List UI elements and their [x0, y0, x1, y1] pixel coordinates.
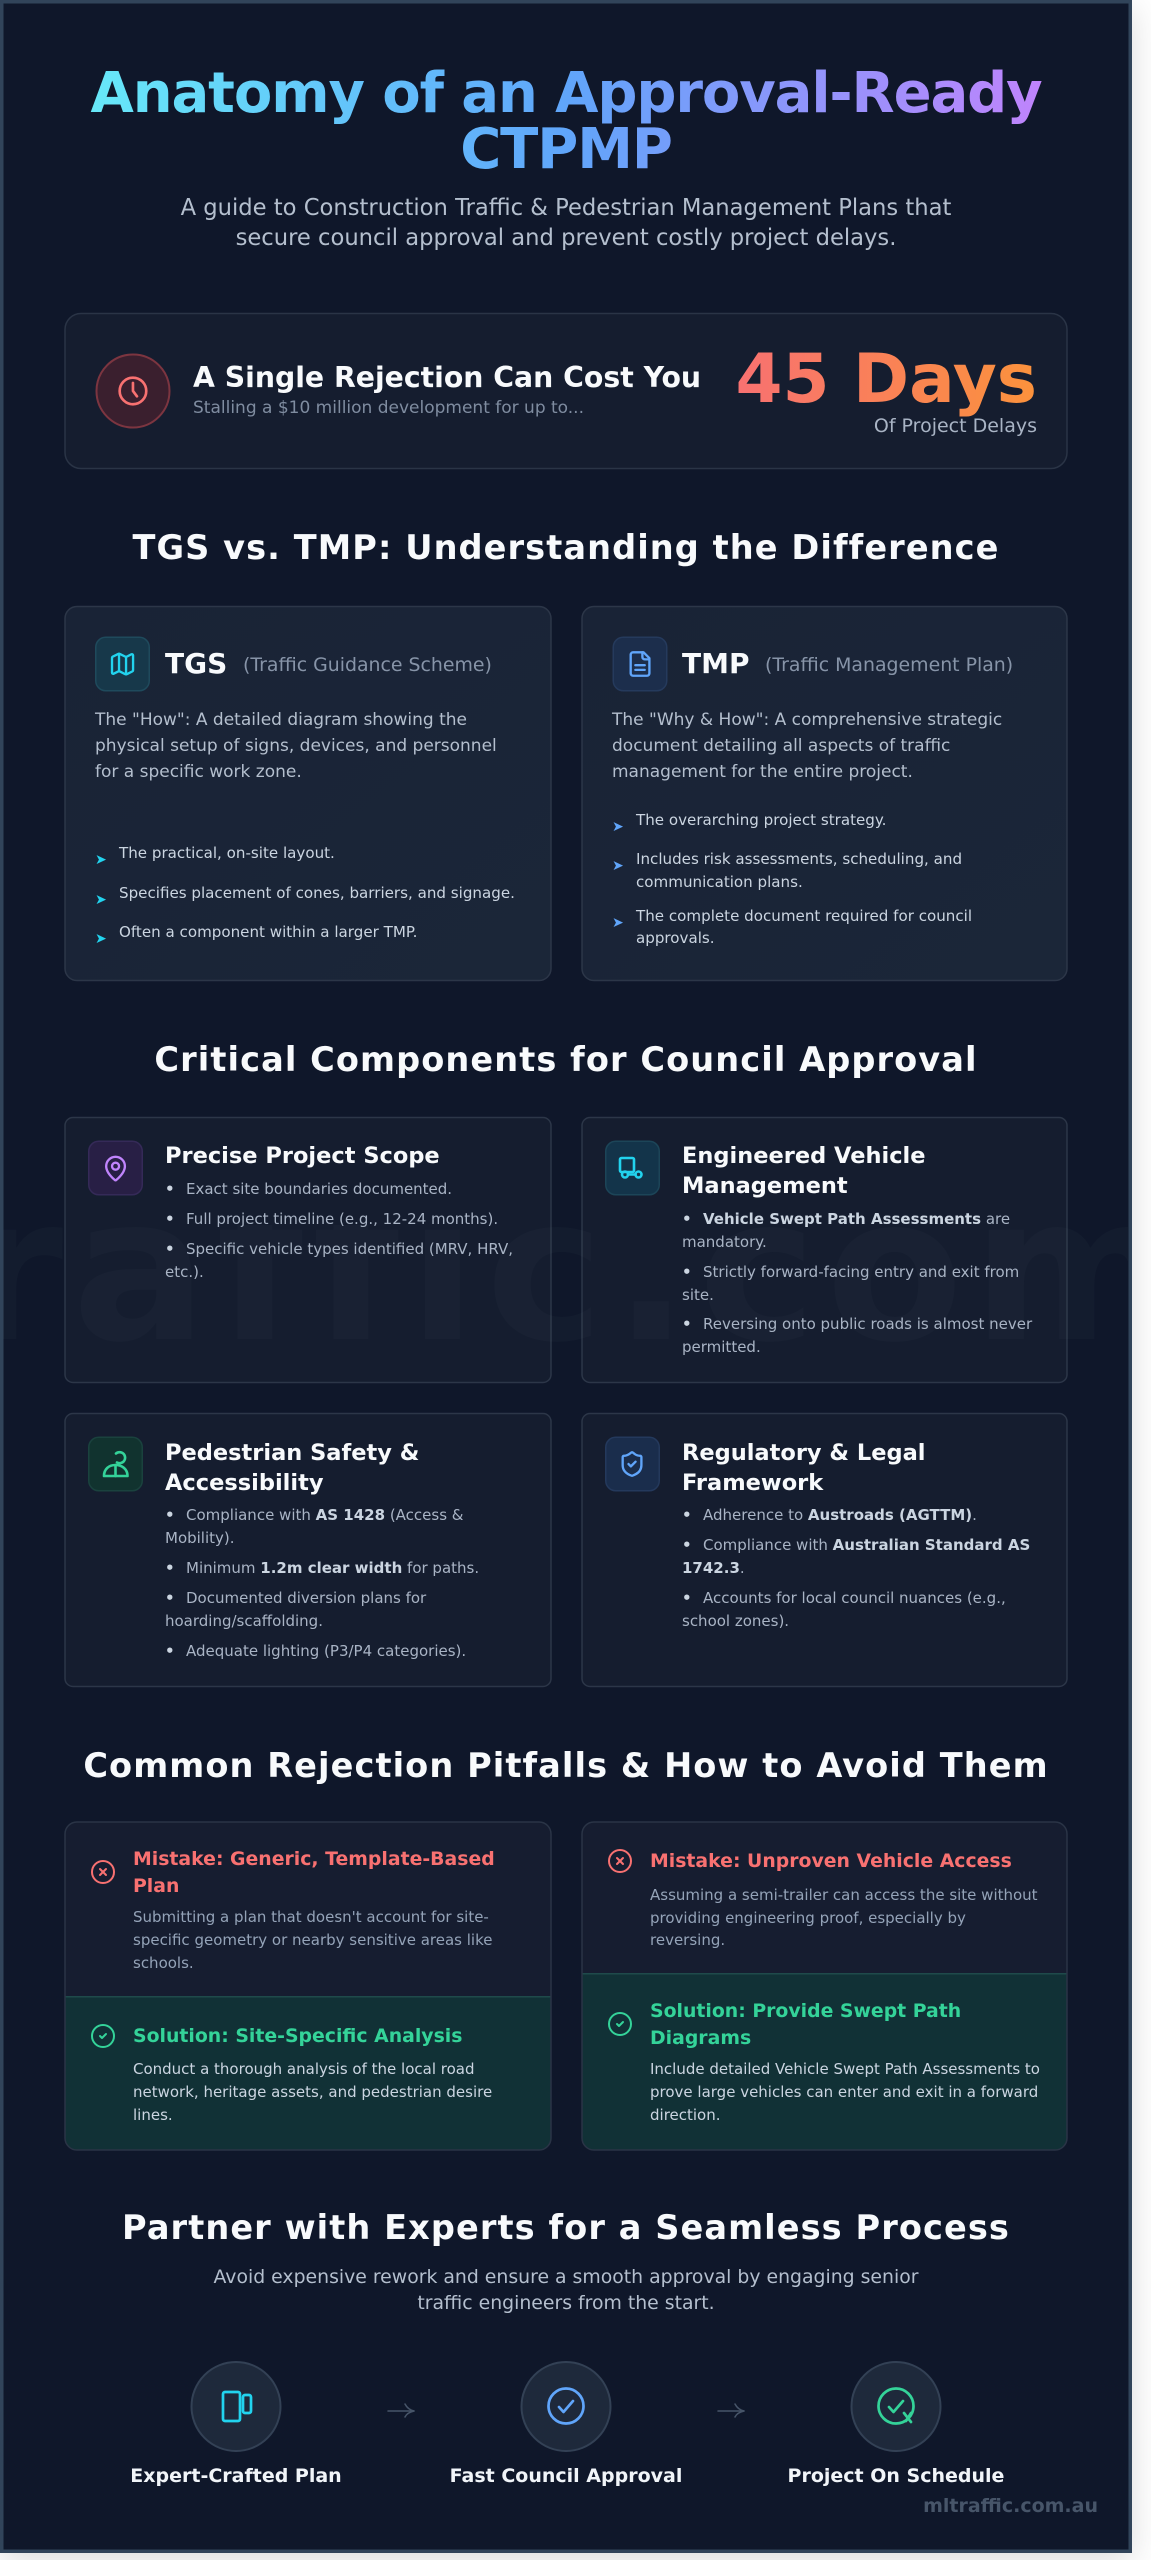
TGS description: The "How": A detailed diagram showing the: [94, 710, 467, 730]
subtitle: secure council approval and prevent costly project delays.: [236, 225, 896, 251]
icon: document: [613, 637, 667, 691]
icon: check circle: [548, 2388, 584, 2424]
TMP list: [612, 811, 972, 947]
callout heading: A Single Rejection Can Cost You: [193, 361, 701, 394]
mistake block: reversing.: [650, 1931, 725, 1949]
icon: map pin: [89, 1141, 142, 1195]
list: •: [682, 1589, 692, 1607]
panel: regulatory framework: [582, 1414, 1067, 1686]
icon: shield: [606, 1437, 659, 1491]
list: Adherence to Austroads (AGTTM).: [703, 1506, 977, 1524]
TMP description: document detailing all aspects of traffic: [612, 736, 950, 756]
TMP list: ➤: [612, 858, 624, 874]
list: school zones).: [682, 1612, 789, 1630]
list: Mobility).: [165, 1529, 235, 1547]
arrow: [388, 2404, 414, 2417]
list: [682, 1210, 1033, 1356]
section intro: Avoid expensive rework and ensure a smooth approval by engaging senior: [214, 2267, 919, 2288]
callout subtext: Stalling a $10 million development for up to...: [193, 398, 584, 418]
panel: pitfall vehicle access: [582, 1822, 1067, 2150]
title: [90, 61, 1042, 182]
list: •: [682, 1536, 692, 1554]
arrow: [718, 2404, 744, 2417]
heading: critical components: Critical Components for Council Approval: [154, 1040, 978, 1079]
list: •: [165, 1589, 175, 1607]
list: Adequate lighting (P3/P4 categories).: [186, 1642, 466, 1660]
section intro: [214, 2267, 919, 2314]
list: Compliance with Australian Standard AS: [703, 1536, 1030, 1554]
list: Accounts for local council nuances (e.g.,: [703, 1589, 1006, 1607]
TMP list: The complete document required for council: [635, 907, 972, 925]
mistake block: schools.: [133, 1954, 194, 1972]
heading: pitfalls: Common Rejection Pitfalls & How to Avoid Them: [83, 1746, 1049, 1785]
heading: Engineered Vehicle: [682, 1143, 926, 1169]
subtitle: A guide to Construction Traffic & Pedestrian Management Plans that: [181, 195, 952, 221]
panel: precise project scope: [65, 1118, 551, 1382]
TGS list: Often a component within a larger TMP.: [119, 923, 417, 941]
icon: person: [89, 1437, 142, 1491]
TMP list: approvals.: [636, 929, 715, 947]
big number caption: Of Project Delays: [874, 415, 1037, 437]
heading: TGS vs TMP: TGS vs. TMP: Understanding the Difference: [132, 528, 1000, 567]
solution block: Include detailed Vehicle Swept Path Assessments to: [650, 2060, 1040, 2078]
TMP heading: TMP: [682, 647, 749, 680]
list: Specific vehicle types identified (MRV, HRV,: [186, 1240, 513, 1258]
label: Project On Schedule: [788, 2465, 1004, 2487]
TMP full name: (Traffic Management Plan): [765, 654, 1013, 676]
step: expert-crafted plan: [130, 2362, 342, 2487]
title: CTPMP: [460, 117, 672, 182]
list: permitted.: [682, 1338, 761, 1356]
list: Minimum 1.2m clear width for paths.: [186, 1559, 479, 1577]
icon: schedule check: [878, 2388, 914, 2424]
list: Documented diversion plans for: [186, 1589, 427, 1607]
mistake block: Assuming a semi-trailer can access the site without: [650, 1886, 1038, 1904]
solution block: Diagrams: [650, 2028, 751, 2049]
list: Reversing onto public roads is almost never: [703, 1315, 1033, 1333]
mistake block: [609, 1850, 1038, 1949]
list: Vehicle Swept Path Assessments are: [703, 1210, 1010, 1228]
list: •: [165, 1180, 175, 1198]
mistake block: [92, 1849, 495, 1972]
heading: Regulatory & Legal: [682, 1440, 925, 1466]
heading: [682, 1143, 926, 1199]
list: [165, 1180, 513, 1281]
list: •: [165, 1559, 175, 1577]
TGS full name: (Traffic Guidance Scheme): [243, 654, 492, 676]
list: •: [165, 1240, 175, 1258]
panel: engineered vehicle management: [582, 1118, 1067, 1382]
TGS list: The practical, on-site layout.: [118, 844, 335, 862]
label: Fast Council Approval: [450, 2465, 682, 2487]
solution block: Solution: Site-Specific Analysis: [133, 2026, 462, 2047]
solution block: [92, 2025, 492, 2124]
panel: rejection cost: [65, 314, 1067, 468]
list: site.: [682, 1286, 714, 1304]
TGS list: [95, 844, 515, 947]
TMP description: [611, 710, 1002, 782]
heading: Precise Project Scope: [165, 1143, 440, 1169]
solution block: prove large vehicles can enter and exit in a forward: [650, 2083, 1038, 2101]
list: Exact site boundaries documented.: [186, 1180, 452, 1198]
step: fast council approval: [450, 2362, 682, 2487]
icon: plan: [223, 2392, 251, 2421]
list: •: [682, 1263, 692, 1281]
subtitle: [181, 195, 952, 251]
label: Expert-Crafted Plan: [130, 2465, 342, 2487]
list: •: [682, 1315, 692, 1333]
panel: TGS: [65, 606, 551, 980]
icon: clock: [96, 354, 170, 428]
list: hoarding/scaffolding.: [165, 1612, 323, 1630]
list: •: [165, 1642, 175, 1660]
TGS description: [94, 710, 497, 782]
TGS list: ➤: [95, 852, 107, 868]
icon: truck: [606, 1141, 659, 1195]
mistake block: specific geometry or nearby sensitive areas like: [133, 1931, 492, 1949]
TGS description: for a specific work zone.: [95, 762, 302, 782]
panel: pitfall generic plan: [65, 1822, 551, 2150]
TGS list: ➤: [95, 931, 107, 947]
heading: [165, 1440, 419, 1496]
list: •: [682, 1210, 692, 1228]
title: Anatomy of an Approval-Ready: [90, 61, 1042, 126]
section intro: traffic engineers from the start.: [417, 2293, 715, 2314]
heading: Framework: [682, 1470, 824, 1496]
TGS list: ➤: [95, 892, 107, 908]
TMP description: The "Why & How": A comprehensive strategic: [611, 710, 1002, 730]
solution block: direction.: [650, 2106, 721, 2124]
step: project on schedule: [788, 2362, 1004, 2487]
TMP list: ➤: [612, 915, 624, 931]
solution block: [609, 2001, 1040, 2124]
list: Full project timeline (e.g., 12-24 months).: [186, 1210, 498, 1228]
list: •: [165, 1506, 175, 1524]
TMP list: ➤: [612, 819, 624, 835]
TMP description: management for the entire project.: [612, 762, 913, 782]
site credit: mltraffic.com.au: [923, 2495, 1098, 2517]
mistake block: Submitting a plan that doesn't account for site-: [133, 1908, 489, 1926]
solution block: Solution: Provide Swept Path: [650, 2001, 961, 2022]
panel: TMP: [582, 606, 1067, 980]
list: etc.).: [165, 1263, 204, 1281]
solution block: Conduct a thorough analysis of the local road: [133, 2060, 474, 2078]
heading: [682, 1440, 925, 1496]
mistake block: providing engineering proof, especially by: [650, 1909, 966, 1927]
list: •: [165, 1210, 175, 1228]
list: [682, 1506, 1030, 1630]
list: Compliance with AS 1428 (Access &: [186, 1506, 464, 1524]
mistake block: Plan: [133, 1876, 179, 1897]
TMP list: The overarching project strategy.: [635, 811, 886, 829]
TGS heading: TGS: [165, 647, 227, 680]
solution block: lines.: [133, 2106, 173, 2124]
heading: Pedestrian Safety &: [165, 1440, 419, 1466]
mistake block: Mistake: Generic, Template-Based: [133, 1849, 495, 1870]
TGS description: physical setup of signs, devices, and personnel: [95, 736, 497, 756]
list: •: [682, 1506, 692, 1524]
list: 1742.3.: [682, 1559, 745, 1577]
TGS list: Specifies placement of cones, barriers, and signage.: [119, 884, 515, 902]
heading: Management: [682, 1173, 848, 1199]
solution block: network, heritage assets, and pedestrian desire: [133, 2083, 492, 2101]
list: mandatory.: [682, 1233, 767, 1251]
TMP list: Includes risk assessments, scheduling, and: [636, 850, 962, 868]
heading: Accessibility: [165, 1470, 324, 1496]
mistake block: Mistake: Unproven Vehicle Access: [650, 1851, 1012, 1872]
list: Strictly forward-facing entry and exit from: [703, 1263, 1019, 1281]
heading: partner with experts: Partner with Experts for a Seamless Process: [122, 2208, 1010, 2247]
icon: map: [96, 637, 149, 691]
TMP list: communication plans.: [636, 873, 803, 891]
panel: pedestrian safety: [65, 1414, 551, 1686]
big number: 45 Days: [735, 339, 1037, 418]
list: [165, 1506, 479, 1660]
